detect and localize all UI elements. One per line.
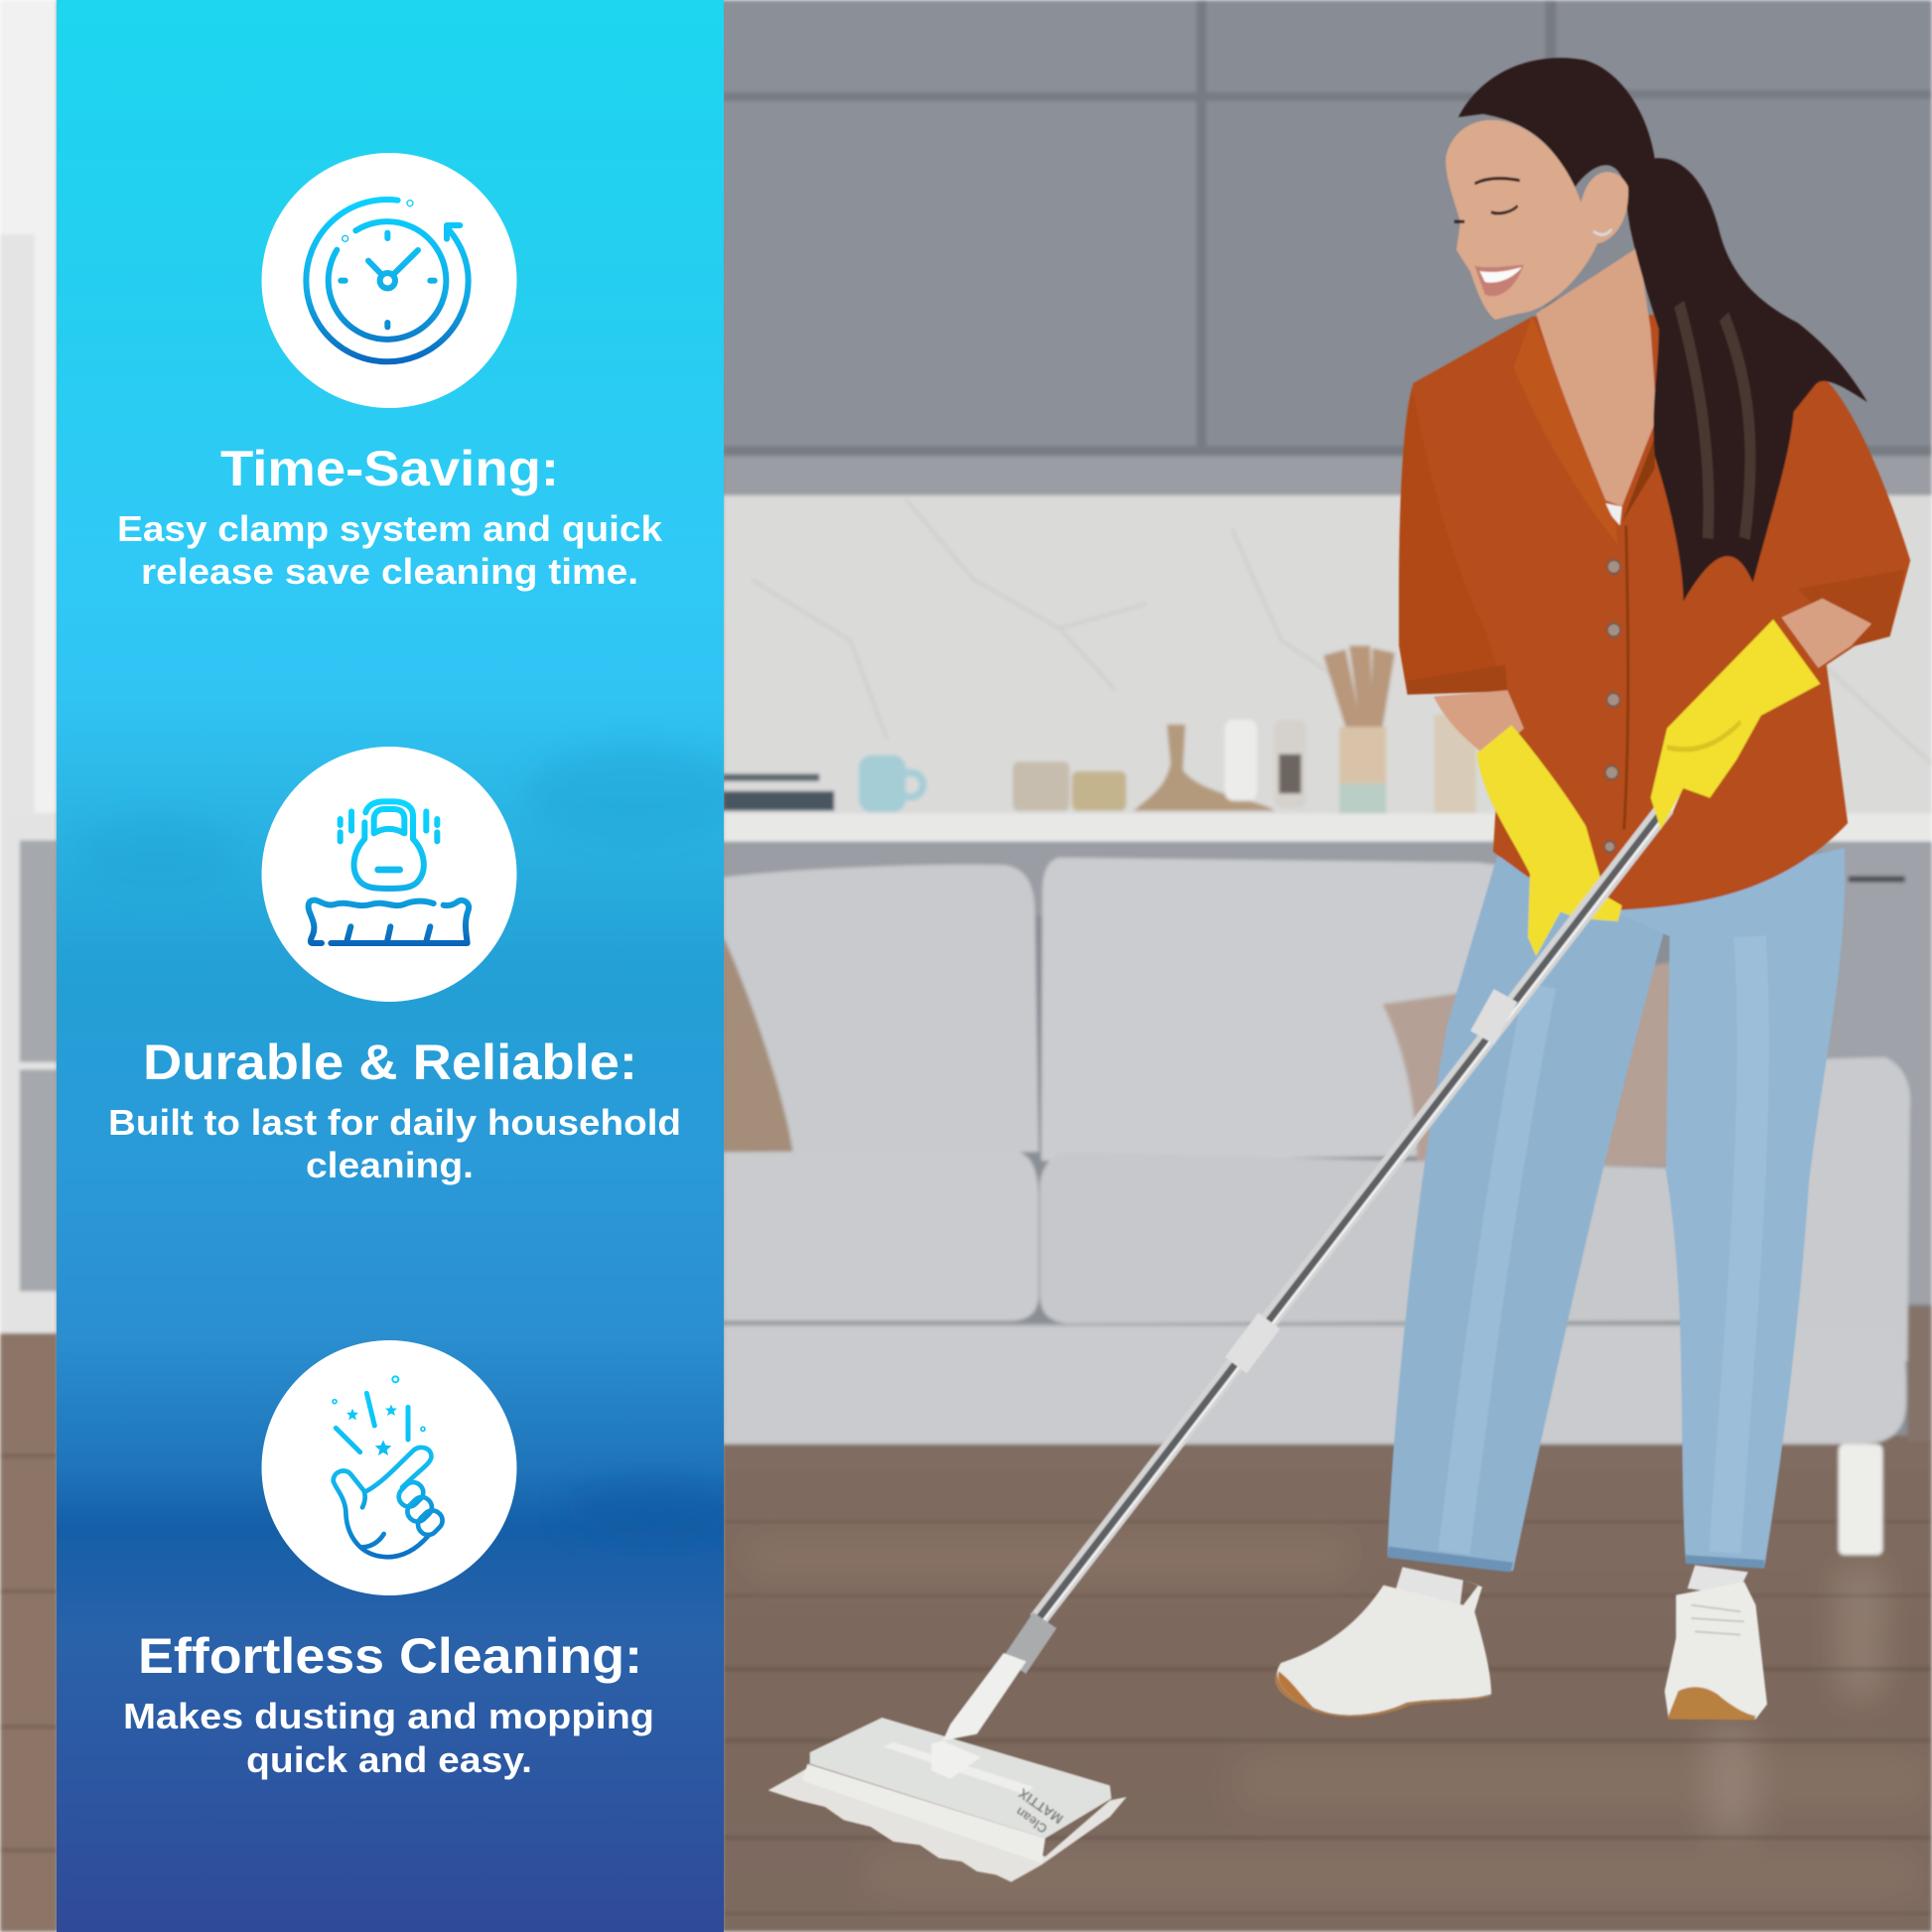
feature 2: durable and reliable: [108, 747, 681, 1185]
sofa: [724, 858, 1910, 1555]
heading: durable and reliable: Durable & Reliable:: [143, 1035, 637, 1090]
circle with kettlebell on foam icon: [262, 747, 516, 1002]
jeans: [1387, 848, 1845, 1573]
marble wall: [724, 495, 1932, 813]
left blue feature panel: [57, 0, 745, 1932]
brown pillow: [724, 936, 793, 1169]
forearms: [1434, 599, 1871, 759]
description: effortless cleaning: Makes dusting and mopping: [123, 1696, 654, 1736]
heading: effortless cleaning: Effortless Cleaning:: [138, 1628, 642, 1684]
lower handle: [943, 1653, 1027, 1740]
description: durable and reliable: [108, 1102, 681, 1185]
floor: [0, 1307, 1932, 1932]
feature 1: time-saving: [117, 153, 663, 592]
description: durable and reliable: Built to last for daily household: [108, 1102, 681, 1143]
upper cabinets: [724, 0, 1932, 495]
pad brand mark: Clean: [1013, 1804, 1050, 1837]
circle with finger snap icon: [262, 1340, 516, 1595]
woman cleaning with mop: [1014, 58, 1910, 1720]
pad ridge: [884, 1742, 1034, 1794]
feature 3: effortless cleaning: [123, 1340, 654, 1780]
torso with shirt: [1399, 58, 1910, 910]
description: time-saving: Easy clamp system and quick: [117, 508, 663, 549]
description: effortless cleaning: [123, 1696, 654, 1780]
counter top and lower cabinets: [724, 813, 1932, 1304]
clamp joint: [931, 1740, 981, 1779]
heading: time-saving: Time-Saving:: [220, 441, 559, 496]
mop handle: [1014, 773, 1683, 1666]
description: durable and reliable: cleaning.: [306, 1145, 474, 1185]
mop head with cloth: [768, 1653, 1127, 1882]
left glove: [1476, 725, 1622, 956]
pad top: [810, 1718, 1111, 1839]
hair: [1458, 58, 1867, 602]
pad base: [802, 1764, 1045, 1863]
sneakers: [1275, 1566, 1767, 1720]
neck and chest: [1536, 247, 1657, 506]
right glove: [1651, 620, 1821, 830]
pink pillow: [1383, 961, 1682, 1166]
description: time-saving: [117, 508, 663, 592]
circle with clock icon: [262, 153, 516, 408]
face: [1446, 120, 1628, 320]
description: time-saving: release save cleaning time.: [141, 551, 638, 592]
left strip of room: [0, 0, 57, 1932]
counter items: [724, 645, 1476, 813]
cleaning cloth: [768, 1769, 1127, 1882]
description: effortless cleaning: quick and easy.: [246, 1739, 532, 1780]
pad brand mark: MATTIX: [1015, 1785, 1066, 1828]
